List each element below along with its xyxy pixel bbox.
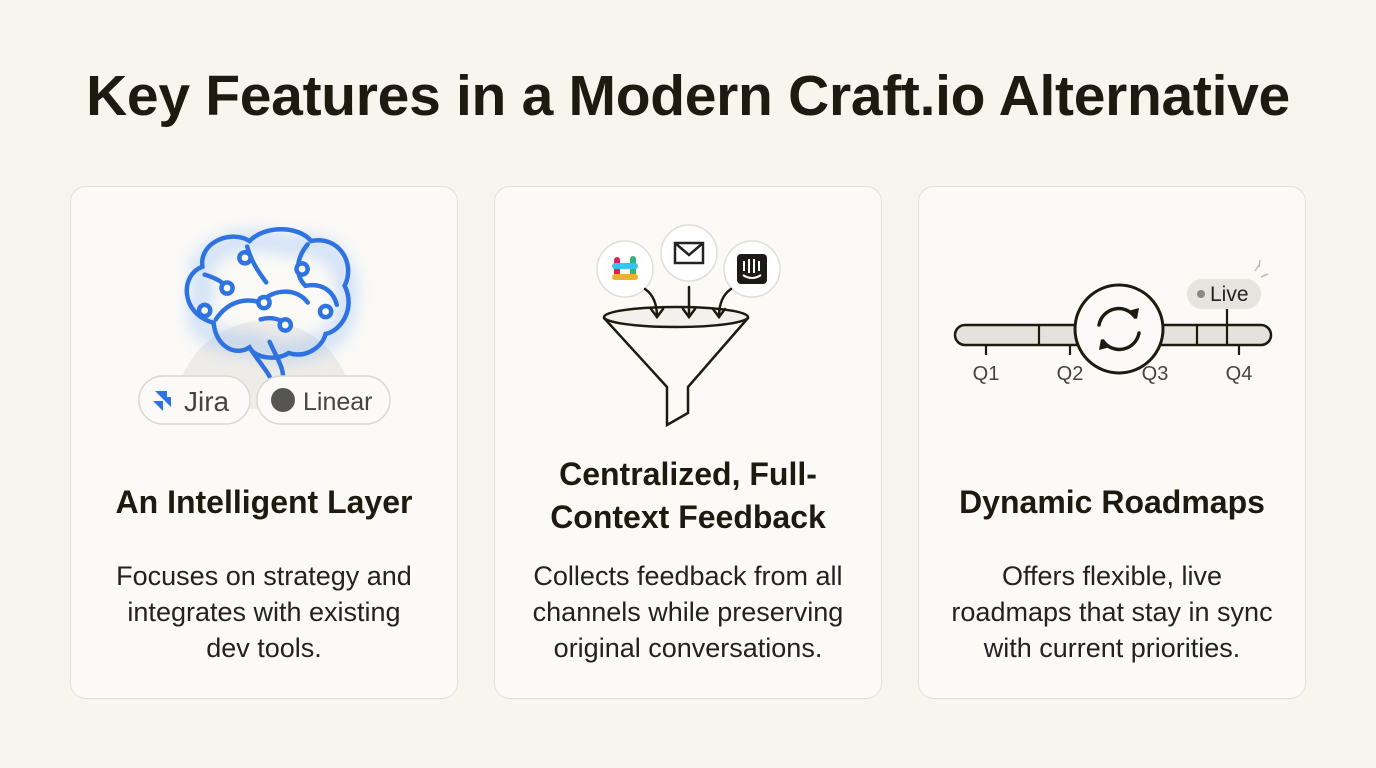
icon: roadmap timeline bbox=[954, 260, 1272, 385]
description bbox=[951, 561, 1273, 663]
heading: Dynamic Roadmaps bbox=[959, 484, 1265, 520]
description: Collects feedback from all bbox=[533, 561, 843, 591]
title: Key Features in a Modern Craft.io Alternative bbox=[86, 64, 1290, 128]
description bbox=[116, 561, 412, 663]
panel: dynamic roadmaps bbox=[918, 186, 1306, 699]
description: integrates with existing bbox=[127, 597, 401, 627]
heading: Centralized, Full- bbox=[559, 456, 817, 492]
icon: roadmap timeline: Q2 bbox=[1057, 363, 1083, 385]
icon: roadmap timeline: Q3 bbox=[1142, 363, 1168, 385]
description: Offers flexible, live bbox=[1002, 561, 1222, 591]
panel: centralized feedback bbox=[494, 186, 882, 699]
icon: brain with integrations: Linear bbox=[303, 388, 372, 416]
description: dev tools. bbox=[206, 633, 322, 663]
icon: brain with integrations bbox=[138, 224, 391, 425]
description: roadmaps that stay in sync bbox=[951, 597, 1273, 627]
icon: roadmap timeline: Q4 bbox=[1226, 363, 1252, 385]
description: channels while preserving bbox=[533, 597, 843, 627]
icon: brain with integrations: Jira bbox=[184, 386, 230, 417]
description: original conversations. bbox=[554, 633, 822, 663]
panel: intelligent layer bbox=[70, 186, 458, 699]
heading: An Intelligent Layer bbox=[116, 484, 412, 520]
description bbox=[533, 561, 843, 663]
heading: Context Feedback bbox=[550, 499, 826, 535]
icon: roadmap timeline: Q1 bbox=[973, 363, 999, 385]
icon: roadmap timeline: Live bbox=[1210, 283, 1249, 306]
icon: funnel with channels bbox=[596, 224, 781, 428]
description: with current priorities. bbox=[984, 633, 1240, 663]
heading bbox=[550, 456, 826, 535]
description: Focuses on strategy and bbox=[116, 561, 412, 591]
